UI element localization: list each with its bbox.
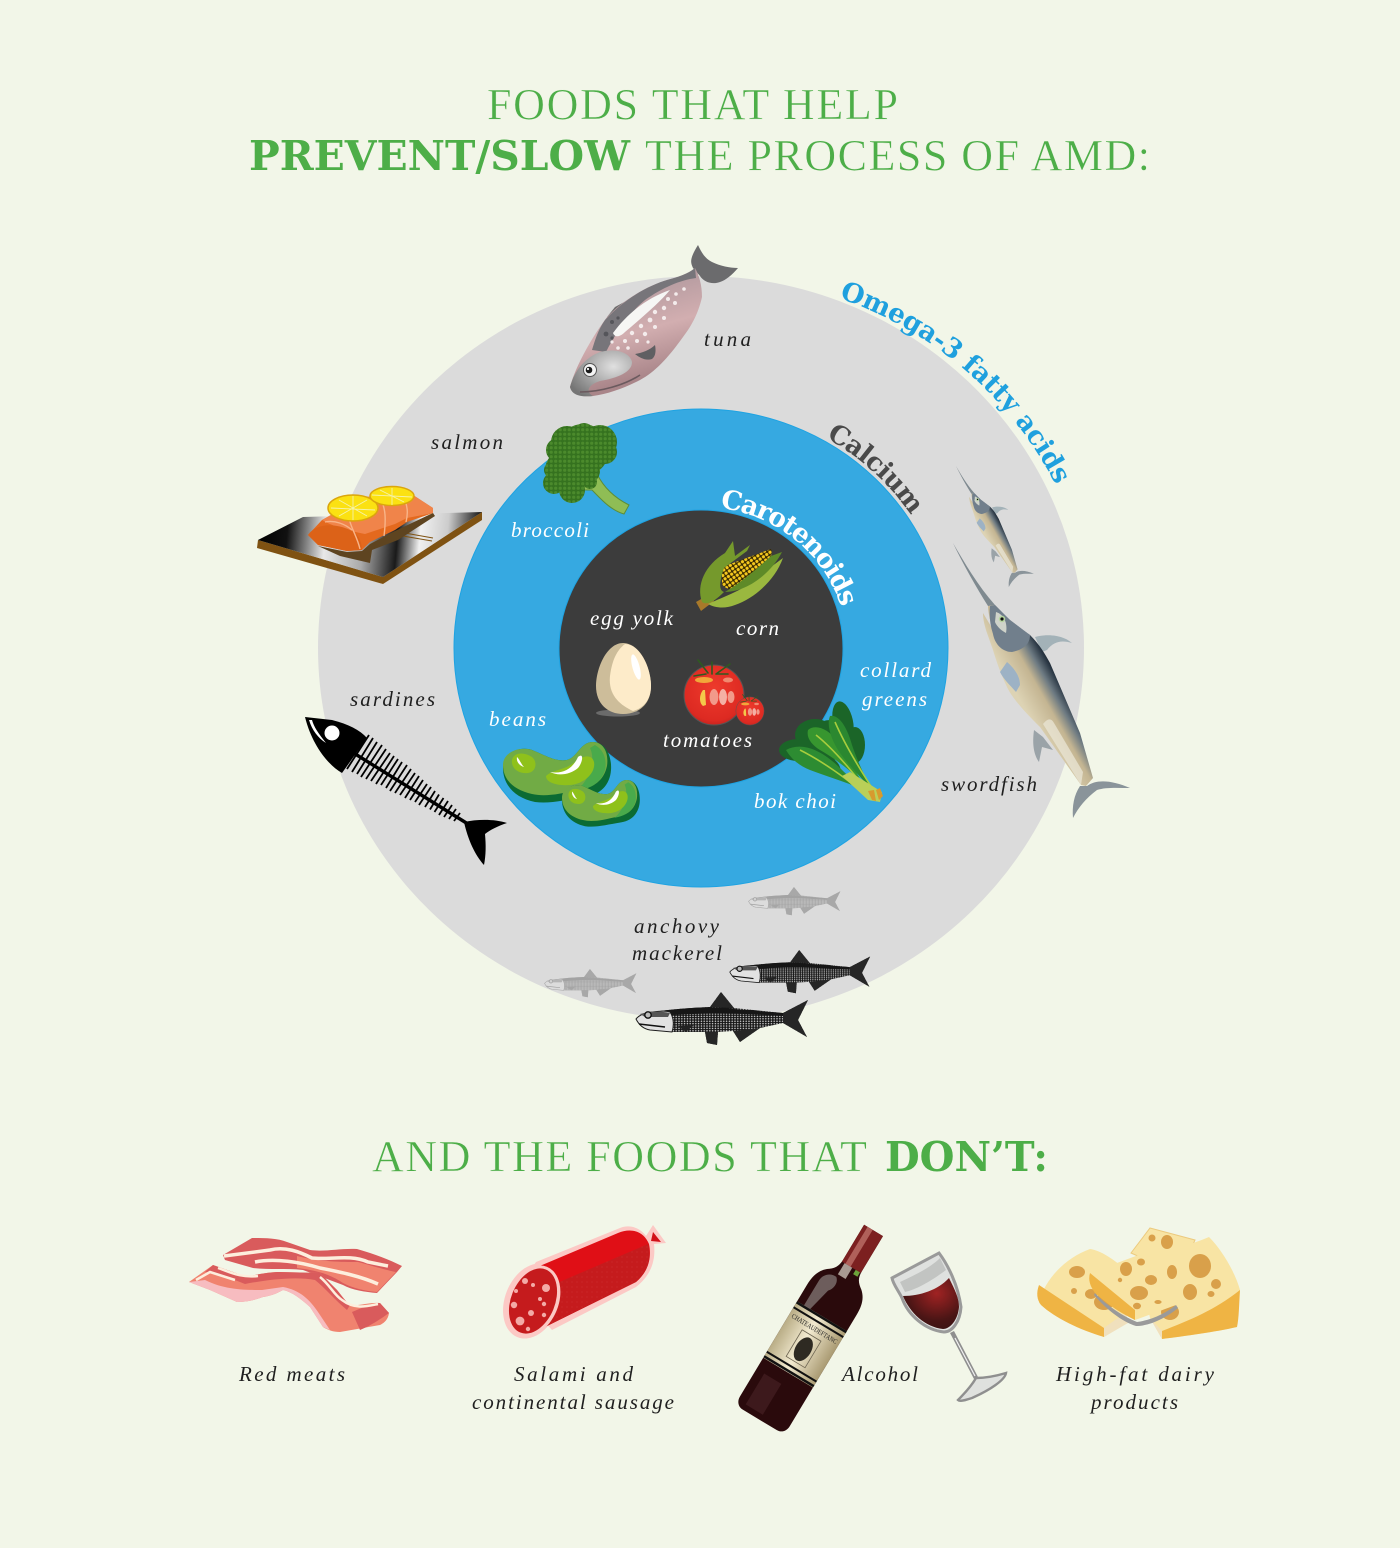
icon: egg [596,643,651,716]
icon: corn [696,541,783,611]
label: collard greens: greens [862,687,927,711]
label: alcohol: Alcohol [840,1362,918,1386]
icon: tomatoes [684,660,764,725]
curved label: Calcium: Calcium [830,425,920,514]
icon: anchovy and mackerel fish [545,887,870,1045]
label: salami and continental sausage: continental sausage [472,1390,674,1414]
curved label: Omega-3 fatty acids: Omega-3 fatty acids [842,282,1067,483]
middle ring: calcium [454,409,948,887]
label: salami and continental sausage [472,1362,674,1414]
icon: salmon on cedar plank [257,486,482,584]
label: sardines: sardines [350,687,435,711]
icon: wine glass [892,1253,1006,1401]
label: swordfish: swordfish [941,772,1037,796]
label: anchovy and mackerel: anchovy [634,914,720,938]
title [249,80,1150,180]
label: beans: beans [489,707,546,731]
title: THE PROCESS OF AMD: [645,131,1150,180]
label: red meats: Red meats [238,1362,345,1386]
icon: beans [503,742,640,827]
icon: swordfish pair [953,466,1130,818]
inner circle: carotenoids [559,510,843,787]
icon: cheese [1037,1228,1240,1339]
curved label: Carotenoids: Carotenoids [722,490,854,606]
nutrient wheel [318,276,1084,1020]
label: high-fat dairy products: products [1089,1390,1178,1414]
icon: bacon [189,1238,402,1332]
label: high-fat dairy products: High-fat dairy [1055,1362,1215,1386]
icon: wine bottle: CHATEAUDEFTANC [790,1312,839,1346]
label: collard greens [860,658,932,711]
label: salmon: salmon [431,430,503,454]
icon: broccoli [543,423,629,514]
label: egg yolk: egg yolk [590,606,674,630]
icon: wine bottle [735,1215,898,1435]
title: FOODS THAT HELP [487,80,898,129]
icon: sardine skeleton [305,717,507,865]
label: anchovy and mackerel [632,914,722,965]
icon: tuna [570,245,738,396]
label: tuna: tuna [704,327,751,351]
label: bok choi: bok choi [754,789,836,813]
label: salami and continental sausage: Salami and [514,1362,634,1386]
icon: bok choi [779,699,883,802]
label: collard greens: collard [860,658,932,682]
label: broccoli: broccoli [511,518,589,542]
icon: salami [492,1225,666,1347]
title: PREVENT/SLOW [249,132,631,180]
outer ring: omega-3 [318,276,1084,1020]
heading: foods that don't: AND THE FOODS THAT [372,1132,867,1181]
label: corn: corn [736,616,779,640]
label: tomatoes: tomatoes [663,728,752,752]
label: high-fat dairy products [1055,1362,1215,1414]
label: anchovy and mackerel: mackerel [632,941,722,965]
heading: foods that don't: DON’T: [885,1133,1048,1181]
